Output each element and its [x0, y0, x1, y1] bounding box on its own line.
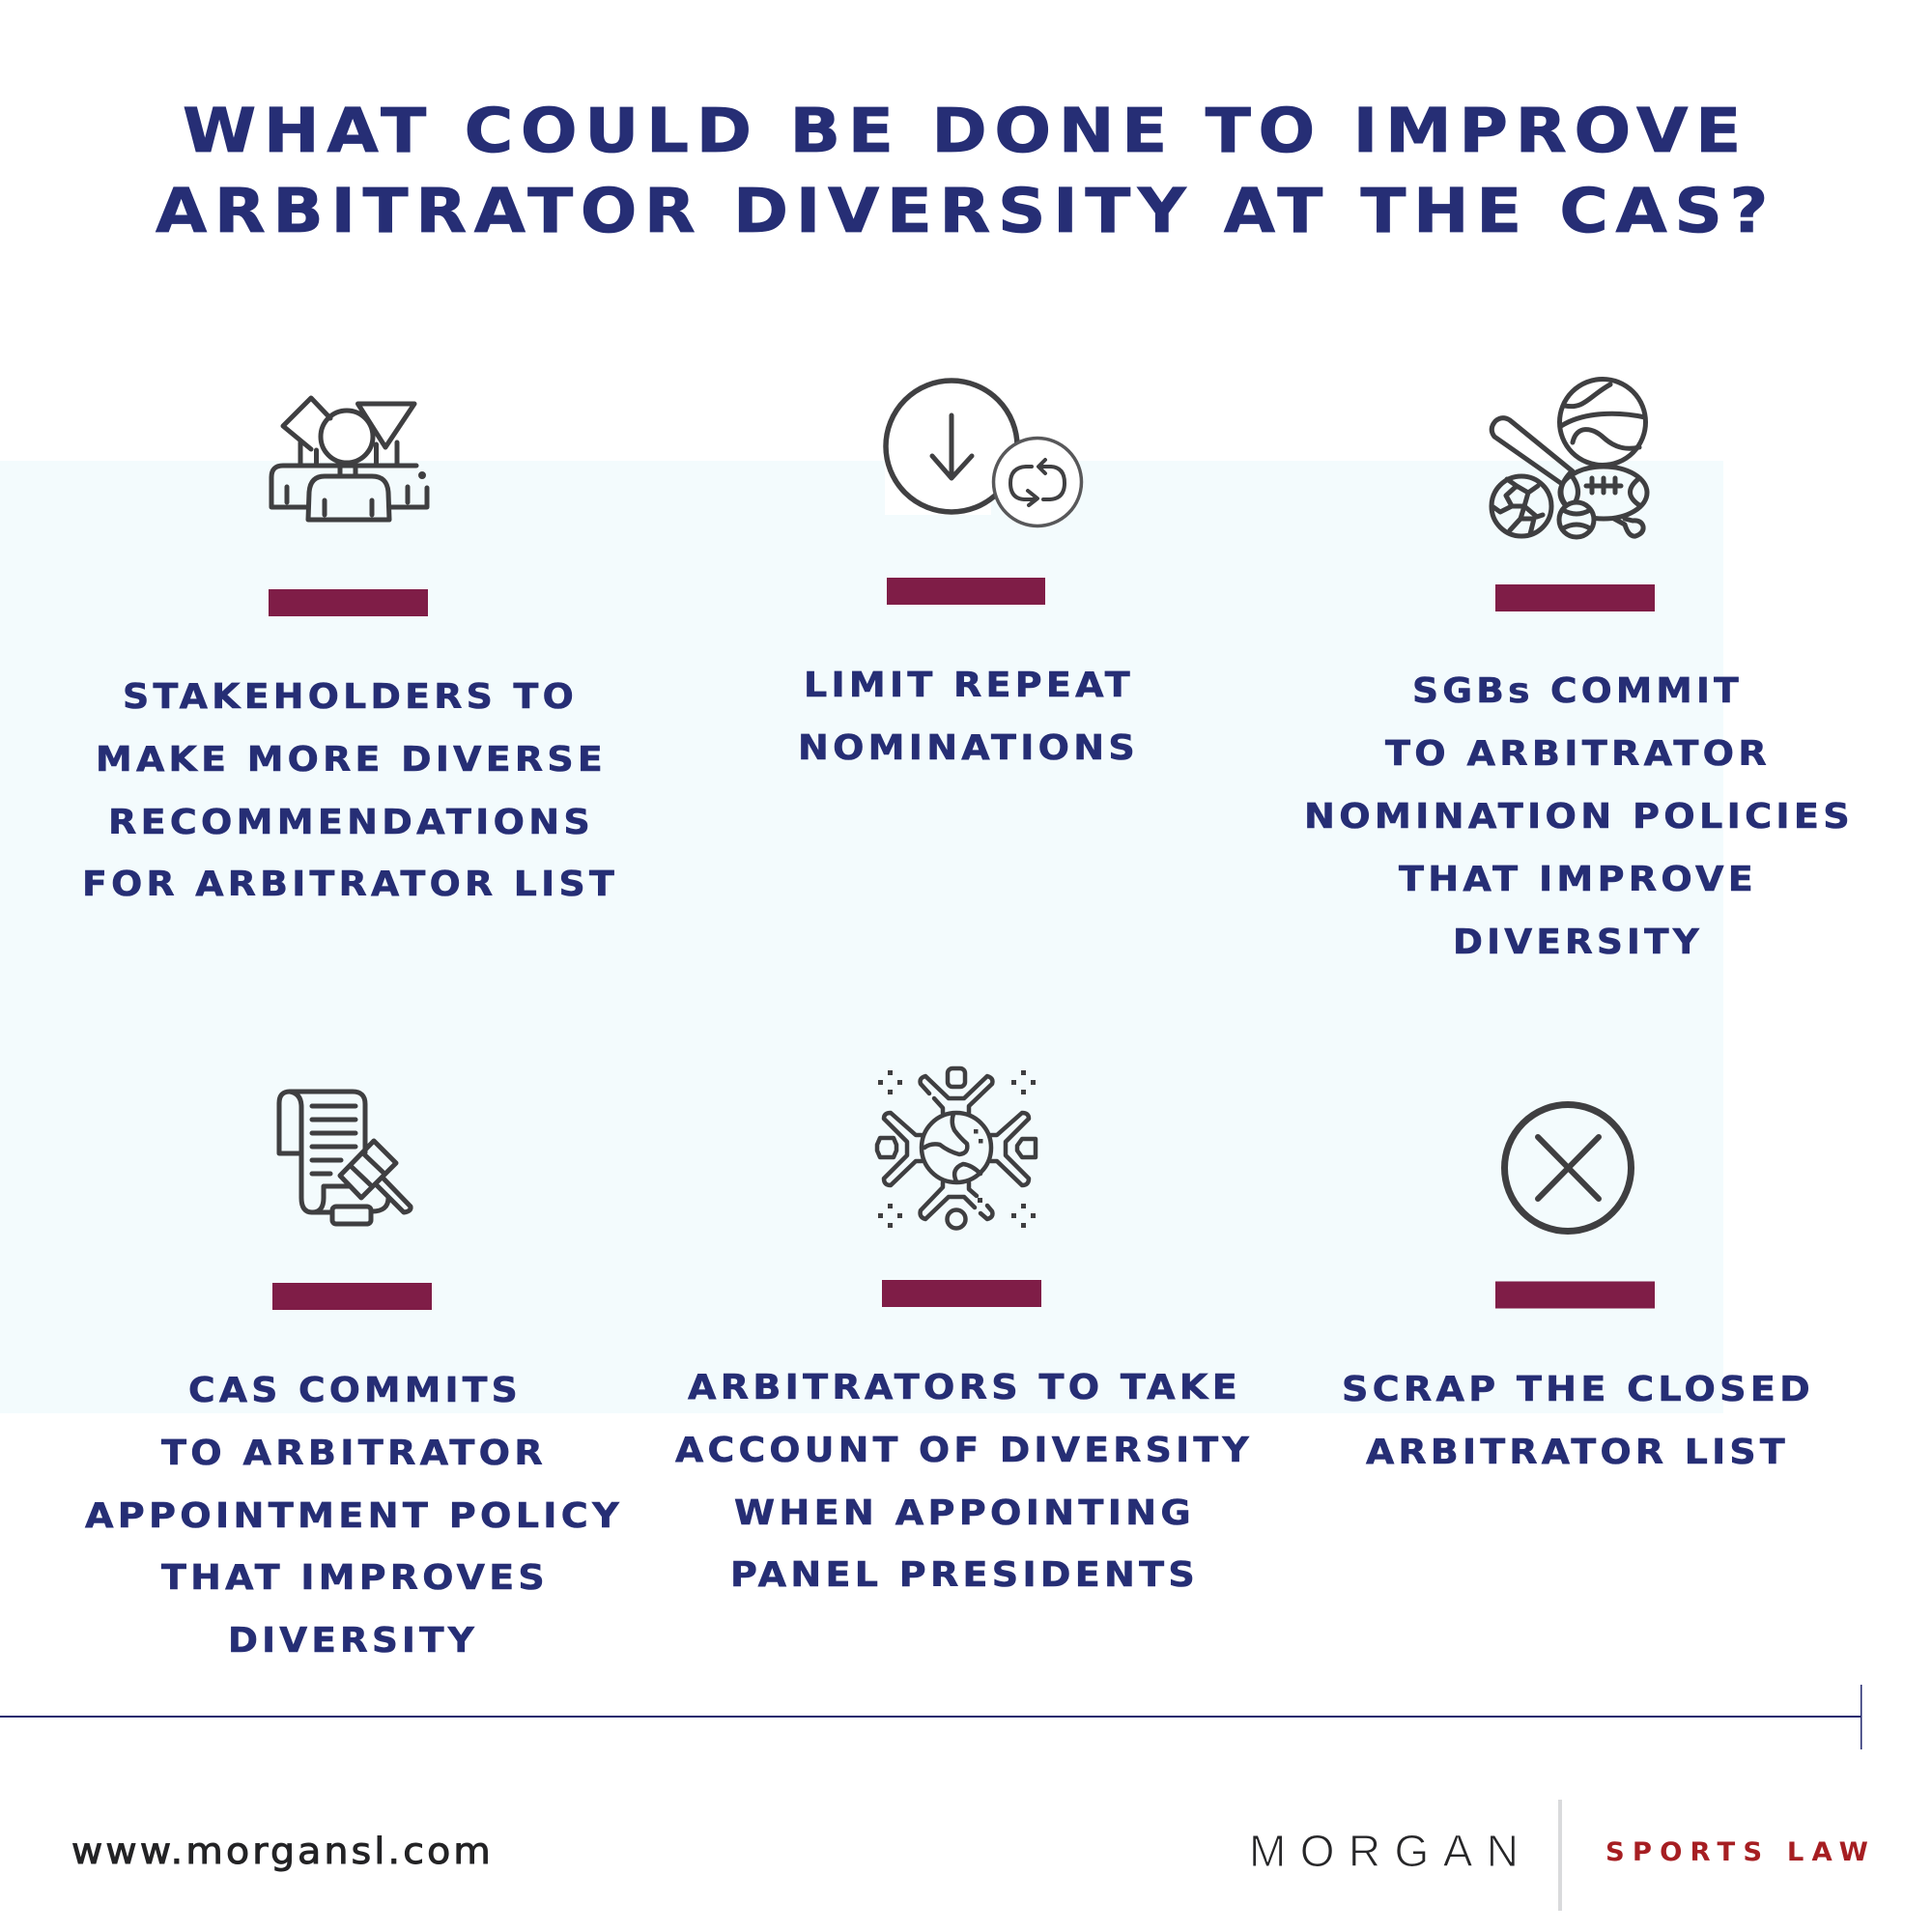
accent bar: [1495, 584, 1655, 611]
panel: stakeholders recommendation: [82, 398, 618, 904]
text block: SGBs COMMIT: [1412, 671, 1743, 711]
text block: [675, 1368, 1253, 1595]
text block: LIMIT REPEAT: [804, 666, 1134, 705]
title: [156, 96, 1776, 246]
background panel: [0, 461, 1723, 1413]
text block: MAKE MORE DIVERSE: [96, 740, 607, 780]
text block: PANEL PRESIDENTS: [730, 1555, 1199, 1595]
text block: NOMINATIONS: [798, 728, 1139, 768]
accent bar: [272, 1283, 432, 1310]
text block: DIVERSITY: [1453, 923, 1703, 962]
text block: ACCOUNT OF DIVERSITY: [675, 1431, 1253, 1470]
text block: RECOMMENDATIONS: [108, 803, 594, 842]
text block: [82, 677, 618, 904]
text block: FOR ARBITRATOR LIST: [82, 865, 618, 904]
text block: TO ARBITRATOR: [161, 1434, 547, 1473]
title: ARBITRATOR DIVERSITY AT THE CAS?: [156, 176, 1776, 246]
title: WHAT COULD BE DONE TO IMPROVE: [183, 96, 1748, 166]
icon: down arrow and repeat: [885, 381, 1082, 526]
text block: STAKEHOLDERS TO: [123, 677, 578, 717]
accent bar: [1495, 1281, 1655, 1308]
logo: Morgan Sports Law: SPORTS LAW: [1605, 1837, 1876, 1867]
icon: globe and people: [877, 1068, 1036, 1229]
text block: THAT IMPROVES: [161, 1558, 549, 1598]
accent bar: [269, 589, 428, 616]
panel: arbitrators take account: [675, 1068, 1253, 1595]
text block: [1342, 1370, 1814, 1472]
text block: THAT IMPROVE: [1399, 860, 1757, 899]
icon dots: [878, 1070, 1036, 1228]
text block: WHEN APPOINTING: [734, 1493, 1195, 1533]
icon: scroll and gavel: [279, 1092, 411, 1224]
accent bar: [882, 1280, 1041, 1307]
icon: cross in circle: [1505, 1105, 1631, 1231]
text block: NOMINATION POLICIES: [1304, 797, 1854, 837]
text block: TO ARBITRATOR: [1385, 734, 1771, 774]
logo: Morgan Sports Law: [1249, 1800, 1876, 1911]
text block: SCRAP THE CLOSED: [1342, 1370, 1814, 1409]
text block: ARBITRATOR LIST: [1366, 1433, 1789, 1472]
text block: [1304, 671, 1854, 962]
panel: SGBs commit: [1304, 379, 1854, 962]
icon: sports balls: [1492, 379, 1647, 537]
text block: [85, 1371, 623, 1661]
panel: scrap closed list: [1342, 1105, 1814, 1472]
text block: CAS COMMITS: [188, 1371, 522, 1410]
text block: DIVERSITY: [228, 1621, 478, 1661]
text block: APPOINTMENT POLICY: [85, 1496, 623, 1536]
text block: [798, 666, 1139, 768]
website url: www.morgansl.com: [71, 1831, 494, 1872]
footer rule: [0, 1685, 1862, 1749]
panel: CAS commits: [85, 1092, 623, 1661]
panel: limit repeat nominations: [798, 381, 1139, 768]
accent bar: [887, 578, 1045, 605]
text block: ARBITRATORS TO TAKE: [688, 1368, 1241, 1407]
icon: people and shapes: [271, 398, 427, 520]
logo: Morgan Sports Law: MORGAN: [1249, 1826, 1519, 1876]
